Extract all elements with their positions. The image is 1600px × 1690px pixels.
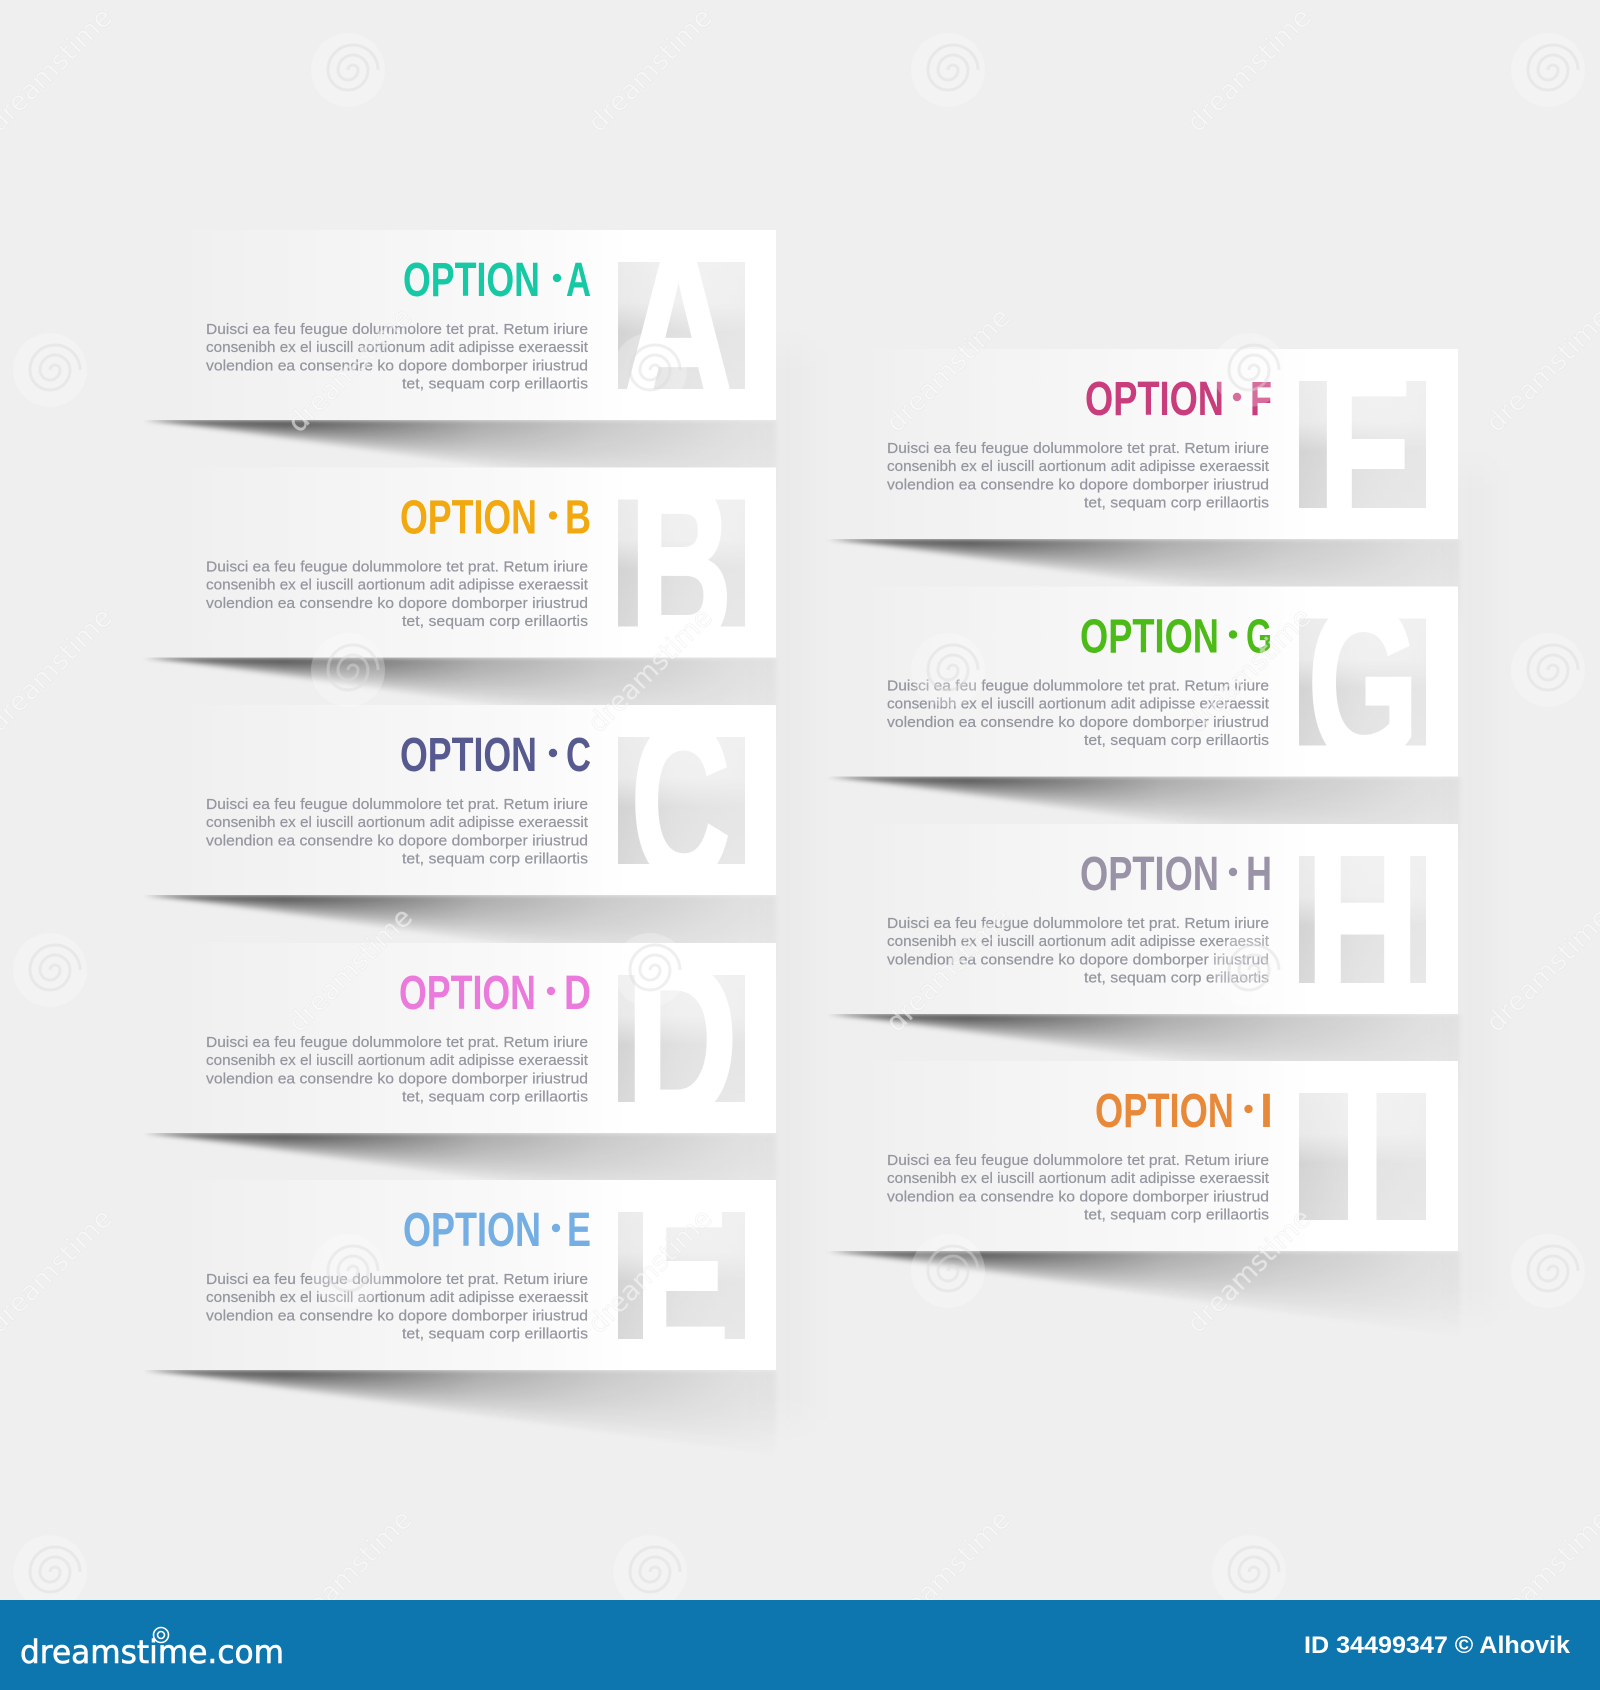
watermark text: dreamstime	[282, 1504, 419, 1641]
heading: option F: OPTION	[1085, 373, 1224, 426]
text block: option G: tet, sequam corp erillaortis	[1084, 733, 1269, 749]
shadows: right column	[828, 539, 1460, 1335]
text block: option F	[887, 441, 1269, 512]
watermark text: dreamstime	[282, 302, 419, 439]
text block: option E: tet, sequam corp erillaortis	[402, 1326, 588, 1342]
watermark text: dreamstime	[1181, 602, 1318, 739]
panel: option A	[206, 230, 776, 420]
icon: letter G: G	[1308, 558, 1418, 808]
icon: letter F: F	[1318, 321, 1410, 571]
watermark text: dreamstime	[1181, 1203, 1318, 1340]
icon: letter D	[618, 975, 745, 1102]
heading: option A: A	[566, 254, 591, 307]
heading: option D: D	[564, 967, 591, 1020]
soft side shade: left column	[770, 350, 806, 1420]
text block: option I: volendion ea consendre ko dopore domborper iriustrud	[887, 1190, 1269, 1206]
panel: option D	[206, 943, 776, 1133]
heading: option G: OPTION	[1080, 610, 1219, 664]
icon: letter D: D	[626, 915, 737, 1165]
text block: option F: consenibh ex el iuscill aortionum adit adipisse exeraessit	[887, 459, 1269, 475]
text block: option B: volendion ea consendre ko dopore domborper iriustrud	[206, 596, 588, 612]
heading: option B: B	[565, 492, 591, 544]
text block: option E: Duisci ea feu feugue dolummolore tet prat. Retum iriure	[206, 1272, 588, 1288]
panel: option B	[206, 468, 776, 658]
text block: option G: volendion ea consendre ko dopore domborper iriustrud	[887, 715, 1269, 731]
icon: letter C	[618, 737, 745, 864]
text block: option E	[206, 1272, 588, 1342]
text block: option D: tet, sequam corp erillaortis	[402, 1090, 588, 1106]
text block: option I: consenibh ex el iuscill aortionum adit adipisse exeraessit	[887, 1171, 1269, 1187]
text block: option E: consenibh ex el iuscill aortionum adit adipisse exeraessit	[206, 1290, 588, 1306]
text block: option D: volendion ea consendre ko dopore domborper iriustrud	[206, 1072, 588, 1088]
icon: letter B: B	[630, 440, 732, 690]
heading: option I: OPTION	[1095, 1085, 1234, 1138]
text block: option A: volendion ea consendre ko dopore domborper iriustrud	[206, 358, 588, 374]
text block: option B	[206, 560, 588, 630]
heading: option H: OPTION	[1080, 848, 1219, 901]
text block: option C: Duisci ea feu feugue dolummolore tet prat. Retum iriure	[206, 797, 588, 813]
icon: letter E: E	[635, 1152, 729, 1402]
text block: option A: tet, sequam corp erillaortis	[402, 376, 588, 392]
text block: option F: volendion ea consendre ko dopore domborper iriustrud	[887, 478, 1269, 494]
watermark text: dreamstime	[1181, 2, 1318, 139]
icon: letter I: I	[1338, 1033, 1386, 1283]
icon: letter G	[1299, 618, 1426, 746]
text block: option A	[206, 322, 588, 392]
panel: option G	[887, 586, 1458, 776]
heading: option I: I	[1260, 1085, 1273, 1138]
watermark text: dreamstime	[880, 902, 1017, 1039]
text block: option H: Duisci ea feu feugue dolummolore tet prat. Retum iriure	[887, 916, 1269, 932]
text block: option E: volendion ea consendre ko dopore domborper iriustrud	[206, 1308, 588, 1324]
heading: option E: OPTION	[403, 1204, 541, 1257]
watermark text: dreamstime	[880, 302, 1017, 439]
heading: option C: C	[566, 729, 591, 782]
text block: option H	[887, 916, 1269, 986]
watermark text: dreamstime	[282, 902, 419, 1039]
icon: letter A	[618, 262, 745, 389]
text block: option G	[887, 678, 1269, 749]
icon: letter C: C	[631, 677, 730, 927]
text block: option B: tet, sequam corp erillaortis	[402, 614, 588, 630]
text block: option G: consenibh ex el iuscill aortionum adit adipisse exeraessit	[887, 696, 1269, 712]
text block: option C	[206, 797, 588, 868]
text block: option G: Duisci ea feu feugue dolummolore tet prat. Retum iriure	[887, 678, 1269, 694]
text block: option I	[887, 1153, 1269, 1224]
heading: option C: OPTION	[400, 729, 537, 782]
heading: option D: OPTION	[399, 967, 536, 1020]
heading: option H: H	[1246, 848, 1272, 901]
text block: option H: tet, sequam corp erillaortis	[1084, 970, 1269, 986]
heading: option A: OPTION	[403, 254, 540, 307]
text block: option H: volendion ea consendre ko dopore domborper iriustrud	[887, 952, 1269, 968]
icon: letter E	[618, 1212, 745, 1339]
footer logo text: dreamstime.com	[20, 1633, 284, 1671]
text block: option B: consenibh ex el iuscill aortionum adit adipisse exeraessit	[206, 578, 588, 594]
text block: option H: consenibh ex el iuscill aortionum adit adipisse exeraessit	[887, 934, 1269, 950]
text block: option C: tet, sequam corp erillaortis	[402, 852, 588, 868]
text block: option I: tet, sequam corp erillaortis	[1084, 1208, 1269, 1224]
panel: option C	[206, 705, 776, 895]
watermark text: dreamstime	[880, 1504, 1017, 1641]
icon: letter I	[1299, 1093, 1426, 1220]
icon: letter B	[618, 500, 745, 626]
watermark text: dreamstime	[582, 602, 719, 739]
watermark text: dreamstime	[582, 1203, 719, 1340]
text block: option B: Duisci ea feu feugue dolummolore tet prat. Retum iriure	[206, 560, 588, 576]
soft side shade: right column	[1452, 470, 1488, 1310]
heading: option B: OPTION	[400, 492, 537, 544]
footer credit: ID 34499347 © Alhovik	[1304, 1632, 1570, 1659]
icon: letter F	[1299, 381, 1426, 508]
text block: option F: Duisci ea feu feugue dolummolore tet prat. Retum iriure	[887, 441, 1269, 457]
text block: option A: Duisci ea feu feugue dolummolore tet prat. Retum iriure	[206, 322, 588, 338]
text block: option D: consenibh ex el iuscill aortionum adit adipisse exeraessit	[206, 1053, 588, 1069]
heading: option E: E	[567, 1204, 591, 1257]
panel: option E	[206, 1180, 776, 1370]
text block: option A: consenibh ex el iuscill aortionum adit adipisse exeraessit	[206, 340, 588, 356]
text block: option D	[206, 1035, 588, 1106]
text block: option C: consenibh ex el iuscill aortionum adit adipisse exeraessit	[206, 815, 588, 831]
footer bar	[0, 1600, 1600, 1690]
icon: footer spiral	[154, 1628, 168, 1642]
text block: option C: volendion ea consendre ko dopore domborper iriustrud	[206, 834, 588, 850]
shadows: left column	[144, 420, 776, 1454]
heading: option F: F	[1250, 373, 1272, 426]
watermark text: dreamstime	[582, 2, 719, 139]
panel: option F	[887, 349, 1458, 539]
panel: option I	[887, 1061, 1458, 1251]
icon: letter H	[1299, 856, 1426, 983]
heading: option G: G	[1246, 610, 1272, 664]
text block: option I: Duisci ea feu feugue dolummolore tet prat. Retum iriure	[887, 1153, 1269, 1169]
icon: letter A: A	[621, 202, 736, 452]
text block: option D: Duisci ea feu feugue dolummolore tet prat. Retum iriure	[206, 1035, 588, 1051]
icon: letter H: H	[1306, 796, 1419, 1046]
text block: option F: tet, sequam corp erillaortis	[1084, 496, 1269, 512]
panel: option H	[887, 824, 1458, 1014]
